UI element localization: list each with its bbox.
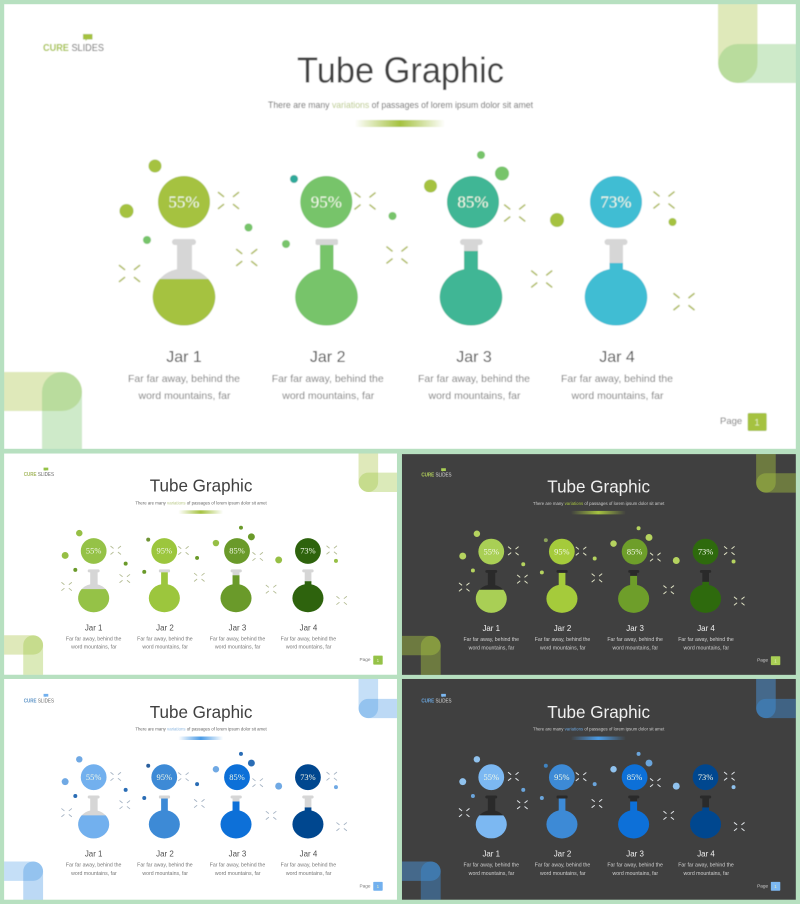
page number: Page <box>757 658 768 663</box>
jar 3: word mountains, far <box>613 645 658 651</box>
jar 1: Far far away, behind the <box>66 636 122 642</box>
jar 3: 85% <box>627 772 642 782</box>
jar 4: Far far away, behind the <box>561 373 673 385</box>
jar 3: 85% <box>229 772 245 782</box>
jar 3: Far far away, behind the <box>607 637 663 643</box>
jar 3 <box>210 538 265 651</box>
jar 3: word mountains, far <box>428 390 521 402</box>
corner decoration: top right <box>359 454 397 492</box>
page number: 1 <box>774 884 777 889</box>
page number <box>757 882 780 891</box>
jar 4 <box>678 539 734 651</box>
jar 4: word mountains, far <box>571 390 664 402</box>
floating dots <box>62 752 338 800</box>
accent bar <box>571 737 626 740</box>
sparkle marks <box>459 547 744 605</box>
jar 4: word mountains, far <box>286 871 332 877</box>
jar 4 <box>281 538 336 651</box>
jar 1 <box>463 764 519 877</box>
jar 2: word mountains, far <box>540 645 586 651</box>
jar 1: word mountains, far <box>469 871 515 877</box>
jar 1: Far far away, behind the <box>463 862 519 868</box>
floating dots <box>120 151 676 248</box>
jar 3: Far far away, behind the <box>210 636 265 642</box>
subtitle: There are many variations of passages of lorem ipsum dolor sit amet <box>135 500 267 505</box>
panel: light green slide <box>4 454 397 675</box>
jar 4: Far far away, behind the <box>281 862 336 868</box>
corner decoration: bottom left <box>402 862 441 900</box>
jar 1: Jar 1 <box>482 624 501 633</box>
jar 1: Jar 1 <box>482 850 501 859</box>
panel: light blue slide <box>4 679 397 900</box>
jar 1 <box>463 539 519 651</box>
panel: dark blue slide <box>402 679 796 900</box>
logo: CURE SLIDES <box>421 473 452 479</box>
jar 2: Far far away, behind the <box>137 862 193 868</box>
corner decoration: bottom left <box>4 372 82 449</box>
jar 3 <box>607 539 663 651</box>
jar 2: word mountains, far <box>142 645 188 651</box>
corner decoration: top right <box>359 679 397 718</box>
jar 1: 55% <box>86 546 101 556</box>
floating dots <box>459 526 736 574</box>
jar 3: word mountains, far <box>215 871 261 877</box>
logo <box>24 468 54 478</box>
accent bar <box>178 510 223 514</box>
jar 3: Jar 3 <box>229 623 247 632</box>
accent bar <box>355 120 445 127</box>
page number: 1 <box>377 658 380 663</box>
jar 3: 85% <box>457 192 489 212</box>
jar 2: word mountains, far <box>142 871 188 877</box>
jar 1 <box>66 764 122 877</box>
title: Tube Graphic <box>150 702 252 722</box>
jar 1 <box>128 176 240 402</box>
corner decoration: top right <box>718 4 796 83</box>
accent bar <box>571 511 626 514</box>
jar 3: Jar 3 <box>626 850 644 859</box>
jar 4: word mountains, far <box>683 871 729 877</box>
page number: 1 <box>774 658 777 663</box>
jar 1: word mountains, far <box>138 390 231 402</box>
jar 3 <box>210 764 265 877</box>
page number <box>720 413 767 431</box>
jar 2: 95% <box>554 772 570 782</box>
jar 2: Far far away, behind the <box>535 637 590 643</box>
jar 1: Far far away, behind the <box>463 637 519 643</box>
sparkle marks <box>459 772 744 831</box>
jar 4: Jar 4 <box>300 850 318 859</box>
jar 2: 95% <box>311 192 342 212</box>
page number <box>360 656 383 665</box>
jar 3: Jar 3 <box>229 850 247 859</box>
jar 3 <box>418 176 530 402</box>
jar 1: Jar 1 <box>85 850 103 859</box>
sparkle marks <box>62 772 347 831</box>
floating dots <box>459 752 736 800</box>
jar 3 <box>607 764 663 877</box>
jar 3: word mountains, far <box>215 645 261 651</box>
logo <box>421 468 452 479</box>
jar 3: word mountains, far <box>613 871 658 877</box>
page number: Page <box>360 657 371 662</box>
logo <box>43 34 104 54</box>
jar 1: Jar 1 <box>166 349 202 366</box>
logo <box>24 694 54 704</box>
jar 1 <box>66 538 122 651</box>
page number: 1 <box>754 418 760 428</box>
jar 3: Far far away, behind the <box>607 862 663 868</box>
page number: 1 <box>377 884 380 889</box>
sparkle marks <box>120 192 694 310</box>
page number: Page <box>360 883 371 888</box>
logo: CURE SLIDES <box>24 698 54 704</box>
subtitle: There are many variations of passages of lorem ipsum dolor sit amet <box>533 501 665 506</box>
logo: CURE SLIDES <box>43 42 104 54</box>
jar 2: Jar 2 <box>156 850 174 859</box>
jar 3: Jar 3 <box>456 349 492 366</box>
jar 3: 85% <box>229 546 245 556</box>
jar 2: 95% <box>157 546 172 556</box>
jar 2: word mountains, far <box>540 871 586 877</box>
corner decoration: top right <box>756 679 796 718</box>
subtitle: There are many variations of passages of lorem ipsum dolor sit amet <box>268 100 533 111</box>
jar 4 <box>561 176 673 402</box>
jar 2: Far far away, behind the <box>272 373 384 385</box>
jar 3: 85% <box>627 546 642 556</box>
jar 2: 95% <box>554 546 570 556</box>
jar 4: Jar 4 <box>697 624 715 633</box>
jar 1: 55% <box>168 192 200 212</box>
jar 4: 73% <box>300 546 316 556</box>
jar 4: 73% <box>698 546 713 556</box>
jar 4: Jar 4 <box>300 623 318 632</box>
logo: CURE SLIDES <box>24 472 54 478</box>
jar 2: word mountains, far <box>281 390 375 402</box>
jar 2 <box>535 539 590 651</box>
jar 4: 73% <box>698 772 713 782</box>
corner decoration: bottom left <box>4 635 43 675</box>
panel: main slide <box>4 4 796 449</box>
jar 4: word mountains, far <box>683 645 729 651</box>
page number: Page <box>720 416 742 427</box>
jar 2: Jar 2 <box>156 623 174 632</box>
jar 2: Far far away, behind the <box>137 636 193 642</box>
page number <box>757 656 780 665</box>
jar 2: Jar 2 <box>554 850 571 859</box>
logo: CURE SLIDES <box>421 698 452 704</box>
logo <box>421 694 452 704</box>
corner decoration: bottom left <box>4 862 43 900</box>
jar 4 <box>678 764 734 877</box>
jar 3: Jar 3 <box>626 624 644 633</box>
jar 1: 55% <box>86 772 101 782</box>
jar 2: 95% <box>157 772 172 782</box>
corner decoration: bottom left <box>402 636 441 675</box>
jar 3: Far far away, behind the <box>210 862 265 868</box>
jar 4: Jar 4 <box>697 850 715 859</box>
jar 2: Far far away, behind the <box>535 862 590 868</box>
jar 1: 55% <box>484 546 499 556</box>
title: Tube Graphic <box>547 476 650 496</box>
jar 2: Jar 2 <box>554 624 571 633</box>
page number <box>360 882 383 891</box>
title: Tube Graphic <box>547 702 650 722</box>
page number: Page <box>757 883 768 888</box>
jar 2 <box>272 176 384 402</box>
jar 4: word mountains, far <box>286 645 332 651</box>
subtitle: There are many variations of passages of lorem ipsum dolor sit amet <box>533 727 665 732</box>
jar 2 <box>137 764 193 877</box>
subtitle: There are many variations of passages of lorem ipsum dolor sit amet <box>135 727 267 732</box>
jar 2 <box>535 764 590 877</box>
jar 2 <box>137 538 193 651</box>
corner decoration: top right <box>756 454 796 493</box>
jar 1: word mountains, far <box>469 645 515 651</box>
jar 1: Far far away, behind the <box>66 862 122 868</box>
panel: dark green slide <box>402 454 796 675</box>
jar 4: 73% <box>300 772 316 782</box>
jar 2: Jar 2 <box>310 349 346 366</box>
floating dots <box>62 526 338 574</box>
jar 1: Jar 1 <box>85 623 103 632</box>
jar 4: Far far away, behind the <box>678 862 734 868</box>
accent bar <box>178 737 223 740</box>
title: Tube Graphic <box>297 50 504 90</box>
jar 1: Far far away, behind the <box>128 373 240 385</box>
jar 1: word mountains, far <box>71 871 117 877</box>
jar 4 <box>281 764 336 877</box>
jar 4: 73% <box>600 192 632 212</box>
title: Tube Graphic <box>150 476 252 496</box>
sparkle marks <box>62 546 347 604</box>
jar 4: Far far away, behind the <box>678 637 734 643</box>
jar 3: Far far away, behind the <box>418 373 530 385</box>
jar 1: word mountains, far <box>71 645 117 651</box>
jar 4: Far far away, behind the <box>281 636 336 642</box>
jar 1: 55% <box>484 772 499 782</box>
jar 4: Jar 4 <box>599 349 635 366</box>
